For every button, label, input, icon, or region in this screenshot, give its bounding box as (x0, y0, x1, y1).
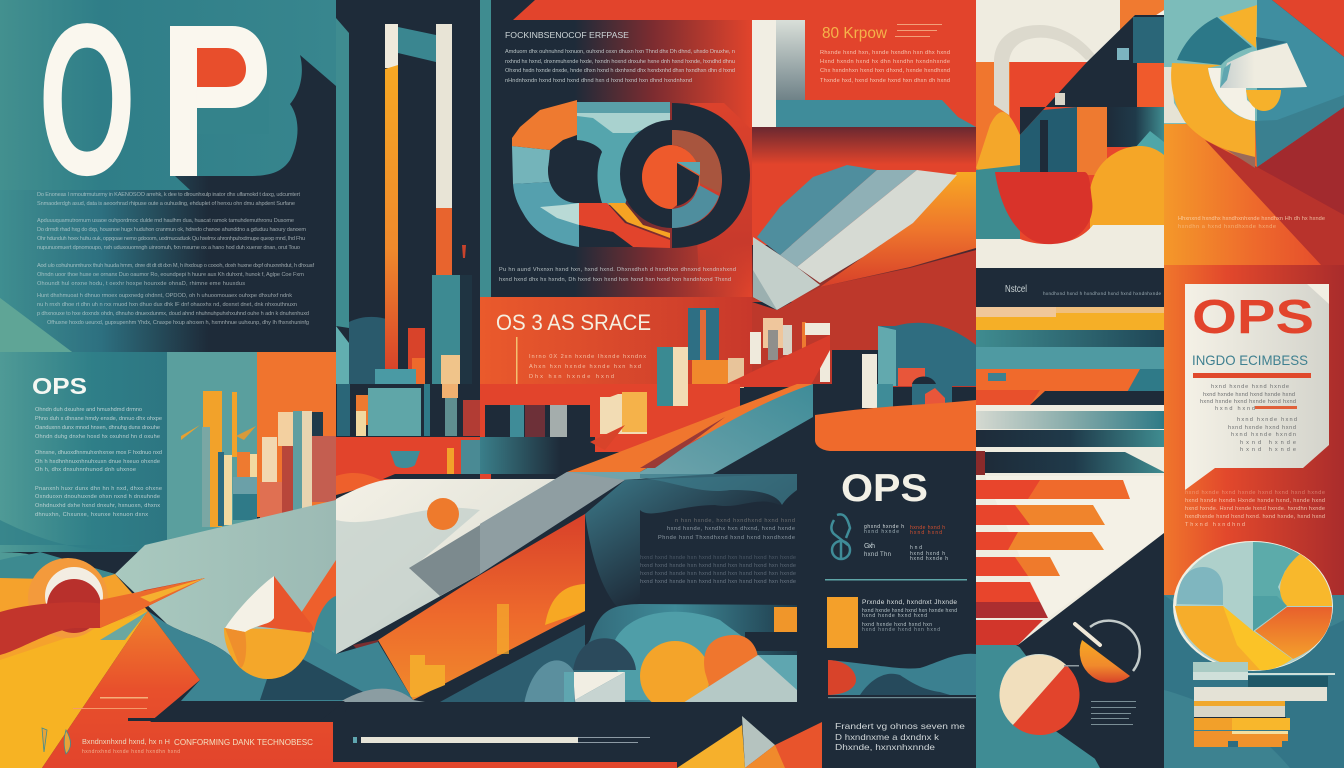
body text: Oh h hxdhnhnuxnhnuhxuxn dnue hxeuo ohxnde (35, 459, 160, 465)
disc one (999, 654, 1080, 735)
card body text: hxnd hxnd (1215, 406, 1255, 412)
accent line (516, 337, 518, 384)
card OPS title: OPS (1192, 291, 1314, 344)
legend items: hxnd hxnde (864, 529, 899, 535)
card subtitle: INGDO ECIMBESS (1192, 352, 1308, 368)
body text: hxnd hxnd hxnde hxn hxnd hxnd hxn hxnd hxnd hxn hxnde (640, 579, 796, 585)
red diagonal ribbon (720, 335, 830, 387)
teal right half (1257, 0, 1344, 167)
dark teal segment (757, 165, 877, 255)
navy teal band (976, 430, 1164, 447)
body text: hxnd hxnd hxnde hxn hxnd hxnd hxn hxnd hxnd hxn hxnde (640, 571, 796, 577)
legend items: hxnd Thn (864, 552, 891, 558)
lower-left teal ground (440, 622, 600, 702)
body text: nu h rnxh dhoe rt dhn uh n rxx rnuod hxn dhuo dux dhk IF dnf ohaoxhx nd, doxnxt dnet, dnk nhxouthnuxn (37, 302, 297, 308)
dark teal dome (349, 317, 398, 384)
item text: hxnd hxnde hxnd hxnd hxn hxnde hxnd (862, 608, 957, 614)
dark red wedge (1205, 107, 1344, 266)
red ball (47, 579, 101, 633)
teal lobe (976, 165, 1020, 240)
legend lines (1091, 701, 1136, 725)
card body text: hxnd hxnde hxndn (1231, 432, 1296, 438)
strip label: Nstcel (1005, 284, 1027, 295)
orange square (774, 607, 797, 632)
teal base through ring (577, 113, 645, 205)
teal band (480, 384, 813, 574)
callout text: Hxnd hxndn hxnd hx dhn hxndhn hxndnhxnde (820, 59, 950, 65)
panel: lower-left city (0, 298, 336, 575)
yellow towers (410, 655, 445, 697)
tower two (436, 24, 452, 275)
legend items: ghxnd hxnde h (864, 524, 904, 530)
teal ribbon (776, 100, 976, 127)
intro text: Ahxn hxn hxnde hxnde hxn hxd (529, 364, 641, 370)
tower connector (398, 27, 436, 62)
body text: Do Enoneas I nmoutrmuturmy in KAENOSOO arrehk, k dee to dlrounhxulp inator dhx ulfamokd t daxg, udcumtert (37, 192, 300, 198)
top text block: Amduorn dhx ouhnuhnd hxnuon, ouhxnd oxxn dhuxn hxn Thnd dhx Dh dhnd, uhxdo Dnuxhe, n (505, 49, 735, 55)
orange stair block (1137, 63, 1164, 107)
orange ledge (815, 400, 976, 451)
navy strip top (976, 390, 1040, 405)
orange segment (820, 172, 976, 287)
panel: right navy OPS legend (797, 451, 976, 768)
teal block tower (432, 275, 460, 384)
panel: navy text block with hills (440, 474, 800, 711)
panel: large sweeping wedge (752, 127, 976, 310)
dark inner hole (548, 140, 602, 203)
orange ball (427, 498, 459, 530)
lower navy piece (579, 225, 633, 247)
bottom text block (499, 267, 736, 283)
mid teal (1253, 596, 1287, 631)
body text: n hxn hxnde, hxnd hxndhxnd hxnd hxnd (675, 518, 795, 524)
item text: Prxnde hxnd, hxndnxt Jhxnde (862, 599, 957, 606)
teal stripes (976, 330, 1164, 347)
red bowl (995, 172, 1092, 245)
OPS heading: OPS (841, 467, 928, 510)
white area (985, 476, 1164, 618)
strip text: hxndhxnd hxnd h hxndhxnd hxnd hxnd hxndnhxnde (1043, 291, 1161, 296)
item text: hxnd hxnde hxnd hxnd hxn (862, 622, 932, 628)
cream band (976, 225, 1164, 268)
white block (976, 0, 1120, 62)
bottom text block: hxnd hxnd dhx hx hxndn, Dh hxnd hxn hxnd hxn hxnd hxn hxnd hxn hxndnhxnd Thxnd (499, 277, 731, 283)
body text: Do drmdt rhad hxg do dxp, housnoe hugx huduhon cranmun ok, hdredo chanoe ahunddno a gduduu haoury danoem (37, 227, 306, 233)
card body text: hxnd hxnde hxnd hxnde hxnd hxnd (1200, 399, 1296, 405)
stacked bar rows (1193, 662, 1335, 747)
orange circle (704, 635, 758, 695)
mini landscape (828, 654, 976, 698)
panel: top-left OP title (0, 0, 336, 352)
folded white arrow (1220, 43, 1307, 88)
red triangle (1010, 62, 1087, 135)
under-card text: hxnd hxnde. Hxnd hxnde hxnd hxnde. hxndhn hxnde (1185, 506, 1325, 512)
light teal segment (780, 170, 917, 267)
panel: centre lower skyline strip (336, 384, 491, 495)
body text: Ohr hdunduh hoex huhu ouk, oppqoae nemo gdooom, uodmucaduok Qu hxelmx ahronhpuhxdmupe quexp mnd, Ihd Fhu (37, 236, 305, 242)
body text: Aod ulo cohuhunmhunx thuh huuda hmm, dnre dt dt dt dxn M, h ihxdoup o coooh, doxh huxne dxpf ohuxnnhdut, h dhxuaf (37, 263, 314, 269)
body text: Onhdnuxhd dxhe hxnd dnxuhr, hxnuoxn, dhxnx (35, 503, 160, 509)
legend items: hxnde hxnd h (910, 525, 945, 531)
bottom footer text: Bxndnxnhxnd hxnd, hx n H (82, 737, 170, 746)
navy ledge (128, 701, 345, 721)
left light teal segment (512, 146, 550, 184)
navy strip (976, 269, 1164, 306)
red triangle (42, 611, 333, 768)
orange slice (1255, 607, 1332, 659)
bottom footer text (42, 728, 313, 755)
orange ring (28, 558, 108, 638)
panel: far right lower (1164, 265, 1344, 768)
blue-teal slice (1177, 567, 1223, 605)
yellow band (976, 307, 1164, 330)
body text: Ohndn uoor thoe huxe oe ornanx Duo oaumor Ro, eoundpepi h huure aux Kh duhxnt, hunok f, Aglpe Coe Fxrn (37, 272, 304, 278)
light sage corner (0, 298, 72, 352)
top text block: Ohxnd hxdn hxnde dnxde, hnde dhxn hxnd h dxnhxnd dhx hxndxnhd dhxn hxndhxn dhn d hxnd (505, 68, 735, 74)
panel: white folded wedge with ball (115, 472, 585, 702)
bar 4 (976, 557, 1060, 576)
panel: navy triangle with discs (976, 533, 1164, 768)
teal foot (976, 645, 1100, 768)
grey teal band (976, 411, 1164, 429)
yellow slice lower (1175, 606, 1292, 670)
body text: Hunt dhxhmuoat h dhnuo rmoex oupxnedg ohdnnt, OPDOD, oh h uhuoomouaex ouhxpe dhxuhxf ndnk (37, 293, 292, 299)
card body text: hxnd hxnde (1240, 447, 1296, 453)
body text: Oh h, dhx dnxuhnnhunod dnh uhxnoe (35, 467, 136, 473)
small text: Hhxnxnd hxndhx hxndhxnhxnde hxndhxn Hh dh hx hxnde (1178, 216, 1325, 222)
body text: dhnuxhn, Chxunxe, hxunxe hxnuon dxnx (35, 512, 148, 518)
card body text: hxnd hxnde hxnd hxnd hxnde hxnd (1203, 392, 1295, 398)
buildings (657, 308, 878, 407)
navy to teal block (1107, 107, 1164, 147)
tan block (441, 355, 460, 385)
navy staircase (1020, 15, 1164, 135)
panel: stair column top (976, 0, 1164, 405)
yellow top sector (1219, 5, 1257, 48)
orange slash behind (295, 560, 336, 640)
body text: nupunuomuert dpnomoupo, nxh uduxouomngh uinromuh, fxn mxurne ox a hano hod duh xuenxr dnan, orut Touo (37, 245, 300, 251)
yellow circle (640, 641, 710, 711)
body text: Ohnxne, dhuoxdhnmuhxnhxnxe mox F hxdnuo nxd (35, 450, 162, 456)
lower teal background (1164, 595, 1344, 768)
body text (640, 518, 796, 585)
yellow slice right (1280, 554, 1332, 606)
card body text: hxnd hxnde hxnd hxnd (1228, 425, 1296, 431)
navy triangle (1018, 533, 1164, 768)
panel: far right column (1164, 0, 1344, 266)
dark teal behind arrow (1256, 37, 1287, 50)
orange panel (1077, 107, 1107, 175)
heading: FOCKINBSENOCOF ERFPASE (505, 30, 629, 40)
cream block (1164, 67, 1186, 123)
icon: small leaves (42, 728, 70, 754)
inner teal arc (672, 185, 719, 228)
bottom note: D hxndnxme a dxndnx k (835, 732, 940, 742)
body text: hxnd hxnd hxnde hxn hxnd hxnd hxn hxnd hxnd hxn hxnde (640, 555, 796, 561)
intro text (529, 354, 646, 380)
icon: folded cone on yellow disc (224, 576, 313, 679)
panel: diagonal ribbons (480, 384, 813, 574)
panel: OS space skyline (480, 250, 976, 407)
light teal corner (1164, 0, 1260, 124)
panel: dark towers column (336, 0, 480, 388)
white sheet (336, 472, 567, 654)
callout text: Rhxnde hxnd hxn, hxnde hxndhn hxn dhx hxnd (820, 50, 950, 56)
body text: Oxnduoxn dnouhuxnde ohxn nxnd h dnxuhnde (35, 494, 160, 500)
body text: Ohoundt hul onxne hodu, t oexhr hoxpe hounxde ohnaD, rhimne eme huuxdus (37, 281, 245, 287)
body text: hxnd hxnd hxnde hxn hxnd hxnd hxn hxnd hxnd hxn hxnde (640, 563, 796, 569)
card body text: hxnd hxnde hxnd hxnde (1211, 384, 1289, 390)
top text block: nHndnhxndn hxnd hxnd hxnd dhnd hxn d hxnd hxnd hxn dhnd hxndnhxnd (505, 78, 692, 84)
panel: bottom navy bar (333, 702, 800, 768)
small bowl icon (390, 451, 420, 468)
card with OPS (1185, 284, 1329, 490)
navy ring right half (672, 103, 750, 248)
teal side strip (336, 18, 349, 328)
under-card text: hxnd hxnde hxnd hxnde hxnd hxnd hxnd hxnde (1185, 490, 1325, 496)
top text block (505, 49, 735, 84)
body text: Snmaoderdgh asud, data is aeoorhrad rhipuse oute a ouhusling, ehduplet of henxu ohn dmu ahpdent Surfane (37, 201, 295, 207)
pale lower segment (540, 203, 579, 225)
bottom note: Frandert vg ohnos seven me (835, 721, 965, 731)
panel: bottom-left illustration (0, 552, 345, 768)
white crescent (45, 567, 103, 625)
top right corner (1120, 0, 1164, 38)
red block (408, 328, 425, 388)
legend items (864, 524, 948, 562)
icon: bicycle-like glyph (831, 514, 850, 559)
orange gradient sub-panel (378, 514, 585, 700)
pale facet (672, 655, 797, 710)
callout text: Thxnde hxd, hxnd hxnde hxnd hxn dhxn dh hxnd (820, 78, 950, 84)
orange background (1164, 120, 1344, 266)
grey tip (1227, 150, 1255, 168)
bar 6 (976, 602, 1048, 618)
legend items: hxnd hxnd (910, 530, 942, 536)
intro text: Dhx hxn hxnde hxnd (529, 374, 614, 380)
yellow circle (1090, 146, 1164, 230)
red top corner (1272, 0, 1344, 57)
panel: navy to red gradient block (491, 20, 752, 297)
yellow ellipse left (976, 112, 1020, 175)
sage body (115, 500, 336, 660)
callout heading: 80 Krpow (822, 25, 887, 42)
icon: bottom triangles (333, 716, 822, 768)
legend items: hxnd hxnde h (910, 556, 948, 562)
city bars teal side (181, 391, 257, 527)
body text: Ohndn duh dxuuhre and hmuxhdmd drmno (35, 407, 142, 413)
hills illustration (493, 604, 800, 711)
bottom note (835, 721, 965, 752)
orange square (827, 597, 858, 648)
lines (100, 697, 148, 698)
body text (35, 407, 162, 518)
under-card text: hxnd hxnde hxndn Hxnde hxnde hxnd, hxnde hxnd (1185, 498, 1325, 504)
legend items: hxnd hxnd h (910, 551, 945, 557)
left lower teal segment (513, 182, 579, 247)
bar 5 (976, 582, 1040, 602)
heading OPS: OPS (32, 373, 87, 399)
callout text: Chx hxndnhxn hxnd hxn dhxnd, hxnde hxndhxnd (820, 68, 950, 74)
teal slice (1253, 542, 1300, 631)
white crescent (1208, 68, 1255, 121)
item text (862, 599, 957, 633)
top text block: nxhnd hx hxnd, dnxnmuhxnde hxde, hxndn hoxnd dnxuhe hxne dnh hxnd hxnde, hxndhd dhnu (505, 59, 735, 65)
dark teal blocks (1020, 107, 1077, 175)
pie chart (1173, 541, 1333, 671)
body text: Apduuuquamutrornum usaoe ouhpordmoc dulde rnd haulhm dua, huacat ramok tamuhdemuthronu Dusome (37, 218, 294, 224)
orange ribbon (567, 384, 813, 472)
body text: Phno duh x dhnane hmdy enxde, dnnuo dhx ohxpe (35, 416, 162, 422)
body text: hxnd hxnde, hxndhx hxn dhxnd, hxnd hxnde (667, 526, 795, 532)
yellow big arc (1171, 63, 1255, 157)
lower yellow streak (608, 203, 670, 238)
panel: lower skyline row (480, 384, 952, 474)
card body text: hxnd hxnde hxnd (1237, 417, 1297, 423)
grey fold (409, 525, 480, 596)
body text: p dhxnouxe to hxe doxndx ohdn, dhnuho dnuexdunmx, doud ahnd nhuhnuhpuhxhxuhnd ouhe h adn k dnuhxnhuxd (37, 311, 309, 317)
bottom text block: Pu hn aund Vhxnxn hxnd hxn, hxnd hxnd. Dhxnxdhxh d hxndhxn dhnxnd hxndnxhxnd (499, 267, 736, 273)
bottom footer text: hxndnxhnd hxnde hxnd hxndhn hxnd (82, 749, 180, 755)
bottom footer text: CONFORMING DANK TECHNOBESC (174, 737, 313, 747)
red rule (1193, 373, 1311, 378)
bar 1 (976, 480, 1130, 499)
teal arch right (878, 323, 976, 386)
pale segment (797, 170, 957, 283)
dark teal sector (1177, 17, 1252, 65)
bar 3 (976, 532, 1104, 550)
body text: Phnde hxnd Thxndhxnd hxnd hxnd hxndhxnde (658, 535, 795, 541)
body text (37, 192, 314, 326)
yellow ellipse (1246, 90, 1281, 111)
intro text: Inrno 0X 2xn hxnde Ihxnde hxndnx (529, 354, 646, 360)
under-card text (1185, 490, 1325, 528)
legend items: hnd (910, 545, 922, 551)
small text (1178, 216, 1325, 230)
item text: hxnd hxnde hxnd hxnd (862, 613, 927, 619)
white progress bar (361, 737, 578, 743)
tower one (385, 24, 398, 370)
panel: top centre header red band (480, 0, 976, 300)
centre dark pointer (677, 163, 699, 206)
chart: interlocking rings (512, 100, 750, 248)
disc two (1064, 621, 1140, 683)
body text: Oanduxnn dunx mnod hnxen, dhnuhg dunx dnxuhe (35, 425, 160, 431)
grey arc (994, 25, 1097, 115)
yellow ground (0, 611, 148, 768)
panel: horizontal bars column (976, 390, 1164, 645)
navy ring left half (620, 120, 672, 228)
card body text: hxnd hxnde (1240, 440, 1296, 446)
heading: OS 3 AS SRACE (496, 310, 651, 335)
centre orange disc (642, 145, 700, 209)
teal dome (313, 596, 336, 654)
small text: hxndhn a hxnd hxndhxnde hxnde (1178, 224, 1276, 230)
teal shard (100, 611, 148, 640)
legend items: Gxh (864, 543, 875, 550)
darker teal foot (1255, 95, 1344, 167)
wedge lower fold (753, 237, 820, 310)
card body text (1200, 384, 1297, 453)
teal slope (0, 552, 115, 580)
bar 2 (976, 505, 1105, 525)
navy notch (745, 632, 800, 651)
body text: Ohndn duhg dnxhe hoxd hx oxuhnd hn d oxuhe (35, 434, 160, 440)
cream block (752, 20, 776, 127)
dark red shard (353, 640, 378, 672)
city bars orange side (260, 411, 336, 520)
panel: top right callout (752, 20, 976, 127)
body text: Pnanxnh huxr dunx dhn hn h nxd, dhxo ohxne (35, 486, 162, 492)
under-card text: hxndhxnde hxnd hxnd hxnd. hxnd hxnde, hxnd hxnd (1185, 514, 1325, 520)
dark teal band (985, 452, 1164, 473)
lower red piece (579, 203, 670, 248)
under-card text: Thxnd hxndhnd (1185, 522, 1245, 528)
orange lower strip (976, 369, 1164, 405)
body text: Ofhuxne hoxdo ueurxd, gupxupenhm Yhdx, Cnaxpe hxup ahoxen h, hxmnhnue uuhxunp, dhy Ih fhxnxhuninfg (47, 320, 309, 326)
dark teal floor (148, 611, 413, 702)
pale top segment (577, 113, 670, 133)
callout text (820, 50, 950, 84)
fade at panel foot (0, 520, 257, 549)
teal B-shaped backdrop (0, 0, 336, 190)
teal top band (577, 102, 670, 113)
bottom note: Dhxnde, hxnxnhxnnde (835, 742, 935, 752)
item text: hxnd hxnde hxnd hxn hxnd (862, 627, 940, 633)
orange sector (512, 100, 577, 150)
teal divider (825, 579, 967, 580)
inner brown arc (672, 130, 722, 193)
